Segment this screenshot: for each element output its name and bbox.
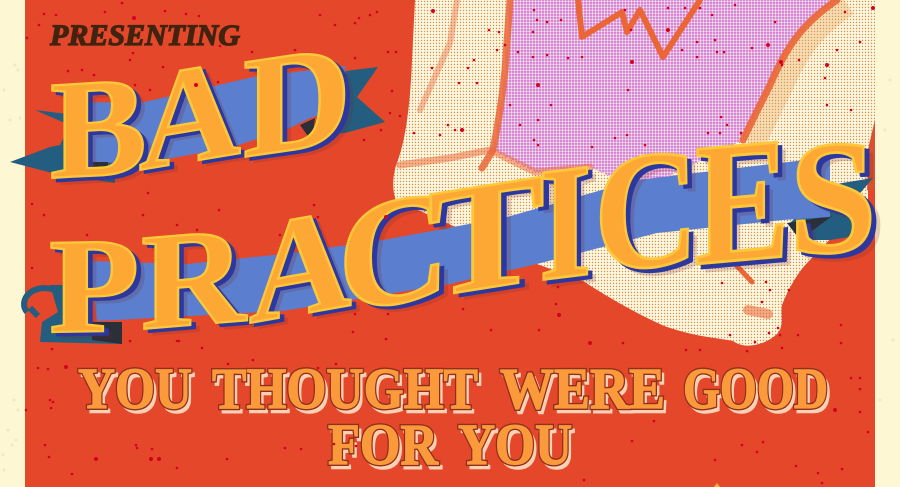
bottom edge star fragment — [714, 483, 720, 487]
letter P: P — [58, 216, 148, 368]
letter C: C — [599, 116, 703, 313]
letter I: I — [547, 136, 600, 323]
subtitle line 1: WERE — [500, 356, 665, 421]
subtitle line 1 — [78, 356, 831, 425]
subtitle line 1: WERE — [500, 356, 665, 421]
letter A: A — [258, 182, 360, 361]
letter T: T — [428, 140, 545, 332]
subtitle line 1: THOUGHT — [212, 356, 478, 421]
subtitle line 1: YOU — [78, 356, 192, 421]
subtitle line 1: GOOD — [686, 360, 831, 425]
letter T: T — [434, 143, 550, 335]
right fold — [787, 216, 832, 240]
letter C: C — [603, 120, 707, 317]
letter E: E — [700, 104, 794, 307]
letter E: E — [704, 108, 798, 310]
figure line work — [400, 0, 837, 314]
letter A: A — [254, 180, 356, 358]
letter A: A — [147, 34, 249, 206]
subtitle line 1: GOOD — [683, 356, 828, 421]
left arm line — [420, 0, 457, 110]
ribbon body — [85, 66, 347, 163]
letter A: A — [249, 177, 352, 355]
letter R: R — [141, 198, 247, 359]
letter A: A — [144, 31, 245, 204]
subtitle line 2: FOR — [328, 412, 439, 477]
left shirt seam — [482, 0, 510, 168]
ribbon body — [90, 157, 830, 321]
subtitle line 2 — [328, 412, 575, 481]
title word: PRACTICES — [49, 99, 886, 368]
right edge shadow strip — [867, 120, 875, 190]
figure body — [390, 0, 880, 350]
subtitle line 1: YOU — [81, 360, 195, 425]
subtitle line 1: THOUGHT — [212, 356, 478, 421]
subtitle line 1: GOOD — [683, 356, 828, 421]
letter R: R — [150, 204, 256, 365]
ribbon left tail — [10, 110, 115, 183]
letter T: T — [438, 146, 555, 338]
letter B: B — [59, 53, 155, 215]
letter P: P — [54, 212, 144, 365]
letter S: S — [789, 105, 877, 289]
subtitle line 2: YOU — [458, 412, 572, 477]
right shirt seam — [743, 0, 837, 140]
letter E: E — [695, 100, 790, 302]
subtitle line 1: THOUGHT — [215, 360, 481, 425]
letter C: C — [347, 160, 459, 354]
letter D: D — [252, 18, 360, 194]
letter S: S — [794, 109, 882, 293]
letter I: I — [543, 133, 596, 320]
collar — [578, 0, 700, 57]
ribbon: PRACTICES — [24, 157, 875, 344]
letter S: S — [798, 112, 886, 297]
halftone figure — [390, 0, 880, 350]
letter C: C — [338, 155, 450, 348]
subtitle line 2: YOU — [461, 416, 575, 481]
letter C: C — [594, 113, 699, 309]
letter P: P — [49, 209, 139, 362]
left curl tail — [24, 288, 55, 316]
ribbon right tail — [315, 67, 385, 135]
letter R: R — [146, 201, 252, 362]
right tail — [790, 178, 875, 240]
heading: PRESENTING: PRESENTING — [49, 19, 240, 52]
ribbon folds — [93, 162, 108, 173]
letter D: D — [243, 12, 351, 188]
subtitle line 2: YOU — [458, 412, 572, 477]
title word: BAD — [50, 11, 360, 216]
subtitle line 2: FOR — [331, 416, 442, 481]
left fold — [92, 322, 122, 344]
letter C: C — [343, 158, 455, 351]
ribbon: BAD — [10, 66, 385, 183]
knuckle mark — [748, 310, 768, 314]
forearm crease — [733, 262, 752, 282]
subtitle line 1: YOU — [78, 356, 192, 421]
subtitle line 1: WERE — [503, 360, 668, 425]
letter B: B — [55, 49, 151, 212]
subtitle line 2: FOR — [328, 412, 439, 477]
letter I: I — [539, 129, 592, 316]
letter D: D — [248, 15, 356, 191]
left tail block — [40, 285, 122, 344]
shirt — [493, 0, 837, 190]
letter B: B — [50, 46, 147, 209]
letter A: A — [139, 28, 241, 201]
elbow crease — [400, 150, 590, 172]
right arm shading — [753, 4, 847, 144]
